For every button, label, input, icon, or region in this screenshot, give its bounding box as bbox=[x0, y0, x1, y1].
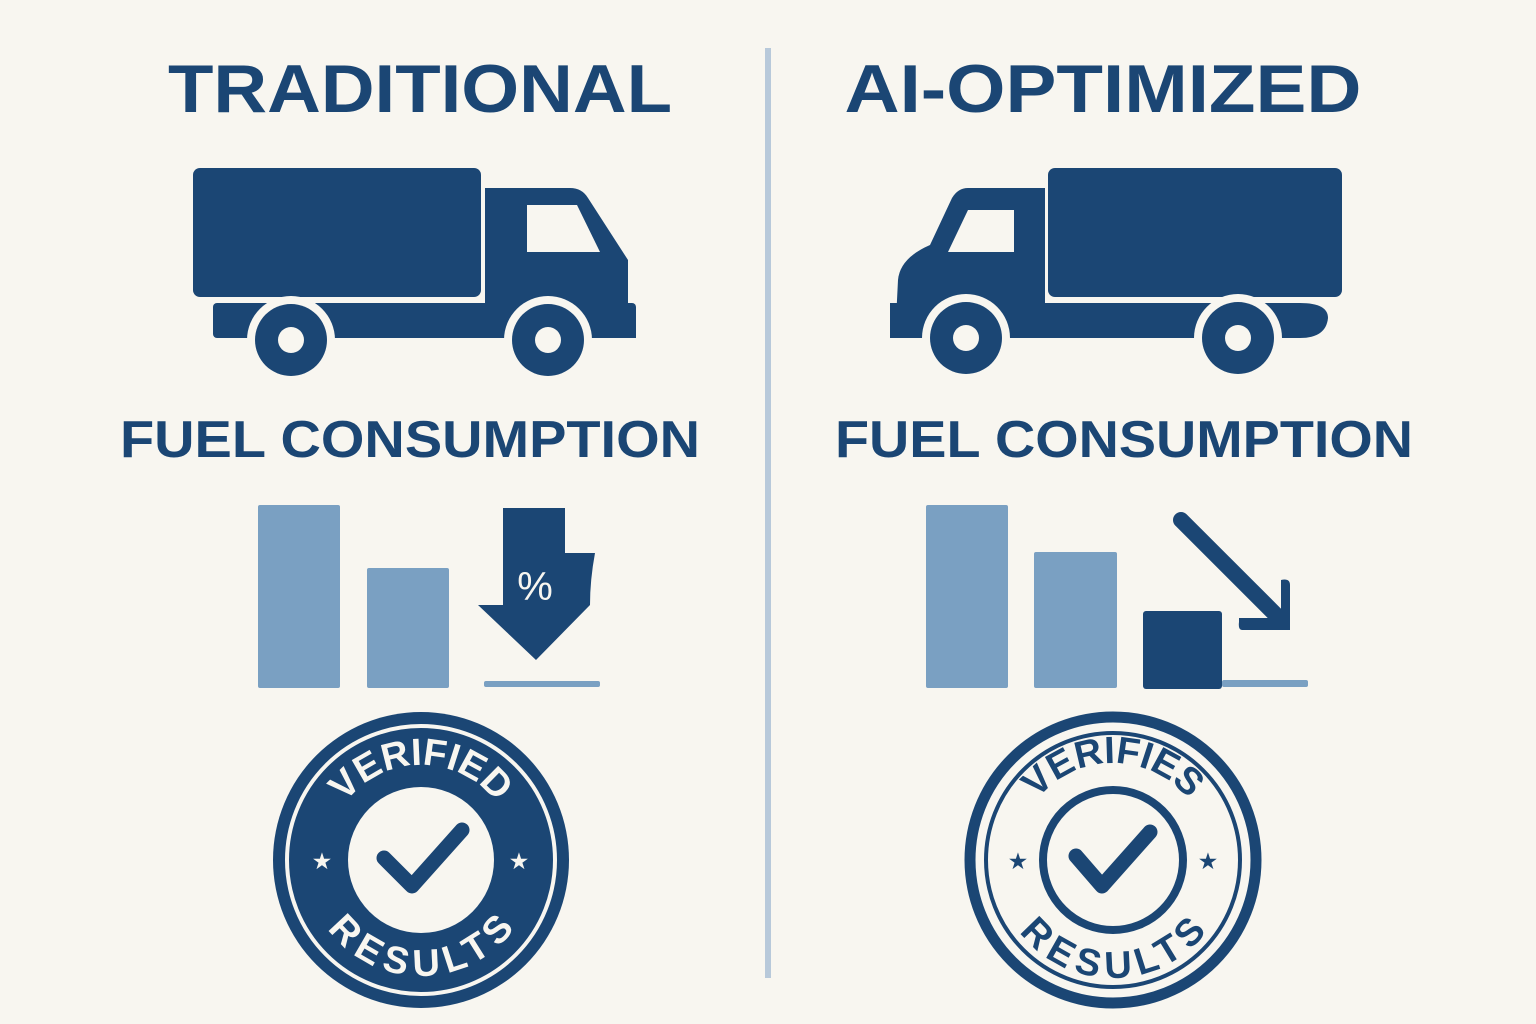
icon: down arrow with percent bbox=[478, 508, 595, 660]
icon: traditional truck bbox=[193, 168, 636, 384]
stamp: traditional verified results: ★ bbox=[313, 851, 331, 873]
icon: down arrow with percent: % bbox=[517, 565, 553, 609]
heading: fuel consumption left: FUEL CONSUMPTION bbox=[120, 411, 700, 469]
icon: diagonal down arrow bbox=[1181, 520, 1290, 630]
stamp: ai-optimized verifies results: RESULTS bbox=[1020, 916, 1204, 978]
title: ai-optimized: AI-OPTIMIZED bbox=[844, 51, 1362, 127]
stamp: ai-optimized verifies results: ★ bbox=[1199, 851, 1217, 873]
stamp: traditional verified results: ★ bbox=[510, 851, 528, 873]
stamp: traditional verified results: RESULTS bbox=[328, 913, 512, 976]
bar chart: ai-optimized bbox=[926, 505, 1308, 689]
bar chart: traditional bbox=[258, 505, 600, 688]
title: traditional: TRADITIONAL bbox=[168, 51, 672, 127]
stamp: traditional verified results bbox=[273, 712, 569, 1008]
stamp: ai-optimized verifies results: VERIFIES bbox=[1018, 736, 1203, 795]
icon: ai-optimized truck bbox=[890, 168, 1342, 382]
heading: fuel consumption right: FUEL CONSUMPTION bbox=[835, 411, 1413, 469]
stamp: traditional verified results: VERIFIED bbox=[326, 738, 510, 796]
stamp: ai-optimized verifies results bbox=[964, 712, 1262, 1008]
stamp: ai-optimized verifies results: ★ bbox=[1009, 851, 1027, 873]
